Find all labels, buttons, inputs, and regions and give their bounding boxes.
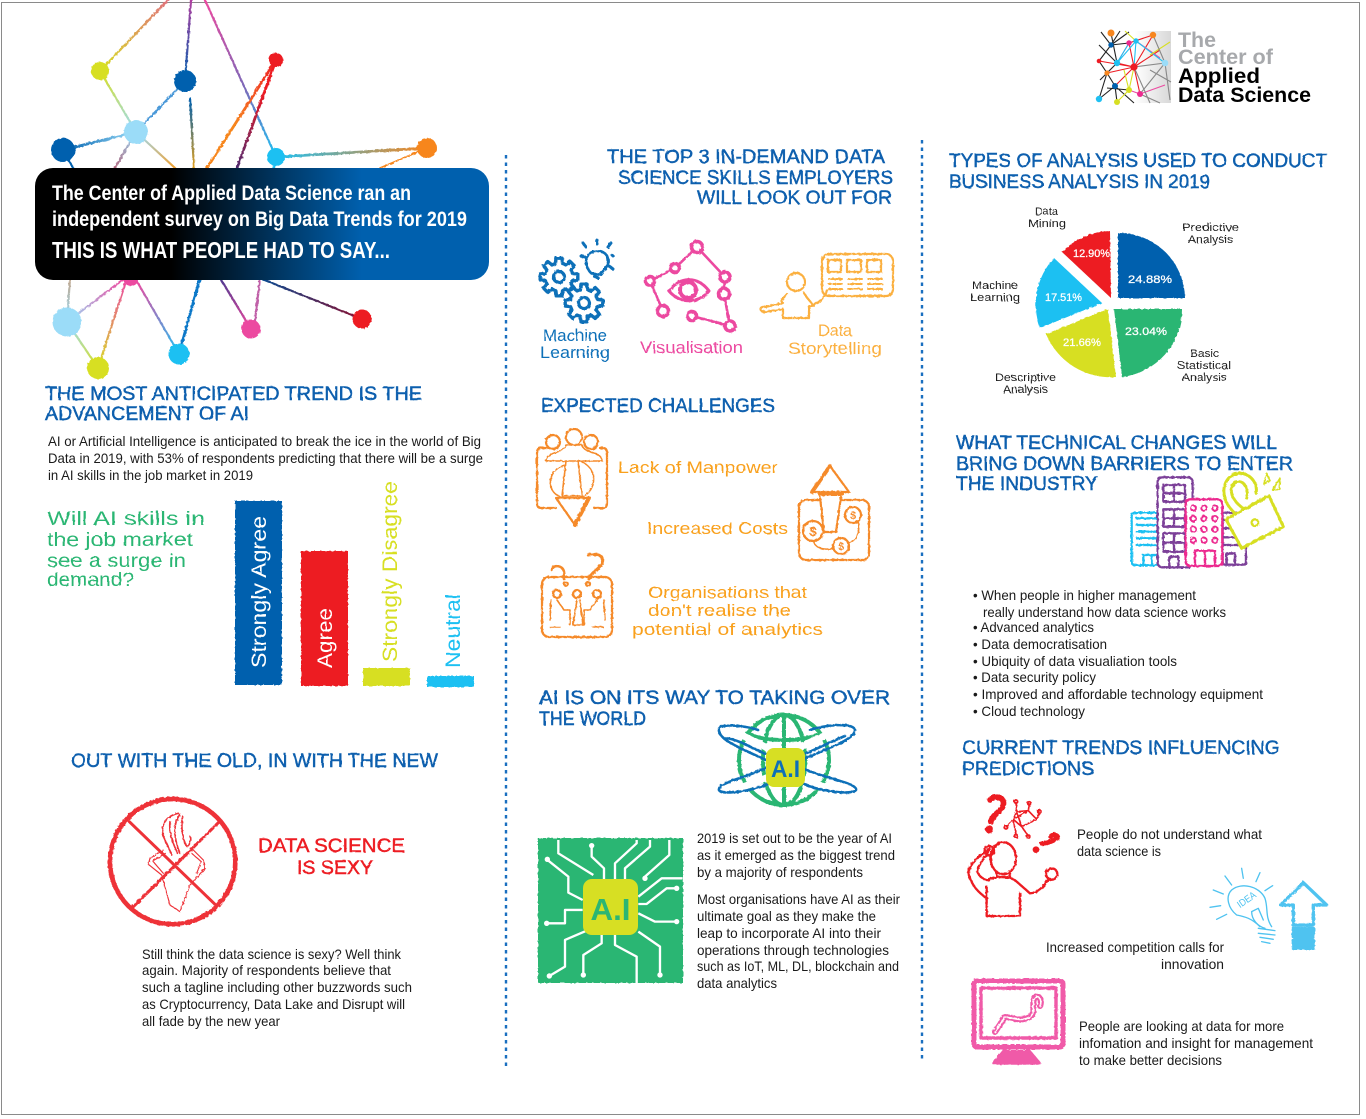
pie labels: Analysis <box>1003 384 1049 396</box>
text <box>632 583 823 639</box>
icon: buildings and open lock <box>1132 473 1283 567</box>
bullet list: • When people in higher management <box>973 588 1196 603</box>
icon: monitor with chart <box>974 981 1063 1063</box>
text block: as it emerged as the biggest trend <box>697 848 895 863</box>
pie labels: Data <box>1035 206 1059 218</box>
intro text: AI or Artificial Intelligence is anticipated to break the ice in the world of Big <box>48 434 481 449</box>
pie labels: Predictive <box>1182 222 1239 234</box>
bullet list: • Data security policy <box>973 670 1096 685</box>
logo: The <box>1178 29 1216 52</box>
text block: such as IoT, ML, DL, blockchain and <box>697 959 899 974</box>
pie chart: 12.90% <box>1073 248 1110 260</box>
label: Machine <box>543 326 607 345</box>
bullet list: • Advanced analytics <box>973 620 1094 635</box>
heading: PREDICTIONS <box>962 759 1094 780</box>
text block: ultimate goal as they make the <box>697 909 876 924</box>
heading <box>607 147 893 209</box>
icon: increased costs: $ <box>809 524 817 539</box>
panel: current trends <box>962 738 1327 1068</box>
pie labels: Analysis <box>1182 372 1228 384</box>
pie labels: Learning <box>970 292 1020 304</box>
icon: idea bulb and up arrow: IDEA <box>1235 890 1259 911</box>
logo: Data Science <box>1178 84 1311 107</box>
pie labels: Mining <box>1028 218 1066 230</box>
bullet list: • Cloud technology <box>973 704 1085 719</box>
network graphic <box>51 0 437 379</box>
survey question <box>47 509 205 591</box>
bullet list <box>973 588 1263 719</box>
logo: Applied <box>1178 65 1260 88</box>
text: Organisations that <box>648 583 807 602</box>
label <box>788 321 882 358</box>
heading: THE MOST ANTICIPATED TREND IS THE <box>45 384 422 405</box>
intro text <box>48 434 483 483</box>
text block: Most organisations have AI as their <box>697 892 900 907</box>
icon: presenter and board <box>760 254 893 318</box>
text <box>1046 940 1224 972</box>
bullet list: • Ubiquity of data visualiation tools <box>973 654 1177 669</box>
heading: OUT WITH THE OLD, IN WITH THE NEW <box>71 751 438 772</box>
icon: confused person <box>968 797 1057 916</box>
survey question: demand? <box>47 570 134 591</box>
bullet list: really understand how data science works <box>983 605 1226 620</box>
intro text: in AI skills in the job market in 2019 <box>48 468 253 483</box>
bar chart: Neutral <box>442 594 465 668</box>
banner: independent survey on Big Data Trends for 2019 <box>52 208 467 231</box>
panel: expected challenges <box>537 396 869 639</box>
panel: top 3 skills <box>540 147 893 362</box>
text: innovation <box>1161 957 1224 972</box>
paragraph: again. Majority of respondents believe that <box>142 963 391 978</box>
pie chart <box>1036 231 1185 377</box>
intro text: Data in 2019, with 53% of respondents predicting that there will be a surge <box>48 451 483 466</box>
heading <box>956 433 1293 495</box>
text block: operations through technologies <box>697 943 889 958</box>
pie labels <box>970 206 1239 396</box>
text: potential of analytics <box>632 620 823 639</box>
paragraph: Still think the data science is sexy? Well think <box>142 947 401 962</box>
paragraph: as Cryptocurrency, Data Lake and Disrupt will <box>142 997 405 1012</box>
heading <box>962 738 1280 780</box>
logo network mark <box>1096 30 1171 105</box>
logo <box>1096 29 1311 107</box>
text: don't realise the <box>648 601 791 620</box>
survey question: see a surge in <box>47 551 186 572</box>
pie chart: 23.04% <box>1125 326 1167 338</box>
icon: AI chip <box>538 838 683 983</box>
label: Learning <box>540 343 610 362</box>
heading: THE WORLD <box>539 709 646 730</box>
pie chart: 21.66% <box>1063 337 1101 349</box>
heading <box>539 688 890 730</box>
pie labels: Statistical <box>1177 360 1231 372</box>
banner: The Center of Applied Data Science ran an <box>52 182 411 205</box>
heading: CURRENT TRENDS INFLUENCING <box>962 738 1280 759</box>
bar chart <box>235 481 474 687</box>
text: Lack of Manpower <box>618 458 778 477</box>
heading: SCIENCE SKILLS EMPLOYERS <box>618 168 893 189</box>
callout: data science is sexy: DATA SCIENCE <box>258 836 405 857</box>
panel: most anticipated trend <box>45 384 483 687</box>
bullet list: • Data democratisation <box>973 637 1107 652</box>
label: Storytelling <box>788 339 882 358</box>
text: Increased competition calls for <box>1046 940 1224 955</box>
icon: gears and bulb <box>540 240 613 322</box>
banner: THIS IS WHAT PEOPLE HAD TO SAY... <box>52 237 390 263</box>
text: infomation and insight for management <box>1079 1036 1313 1051</box>
pie labels: Machine <box>972 280 1018 292</box>
text block: 2019 is set out to be the year of AI <box>697 831 892 846</box>
panel: types of analysis <box>949 151 1327 396</box>
icon: visualisation eye network <box>646 242 735 331</box>
pie chart: 24.88% <box>1128 274 1172 286</box>
heading: ADVANCEMENT OF AI <box>45 404 249 425</box>
text block: data analytics <box>697 976 777 991</box>
text block: by a majority of respondents <box>697 865 863 880</box>
heading: BUSINESS ANALYSIS IN 2019 <box>949 172 1210 193</box>
icon: increased costs: $ <box>838 541 844 553</box>
paragraph <box>142 947 412 1029</box>
pie labels: Basic <box>1190 348 1220 360</box>
banner <box>35 168 489 280</box>
text block <box>697 831 900 991</box>
text: Increased Costs <box>647 519 788 538</box>
survey question: the job market <box>47 530 194 551</box>
heading: WHAT TECHNICAL CHANGES WILL <box>956 433 1277 454</box>
heading: EXPECTED CHALLENGES <box>541 396 775 417</box>
text <box>1079 1019 1313 1068</box>
label: Data <box>818 321 853 340</box>
heading <box>949 151 1327 193</box>
label: Visualisation <box>640 338 743 357</box>
bullet list: • Improved and affordable technology equipment <box>973 687 1263 702</box>
survey question: Will AI skills in <box>47 509 205 530</box>
logo: Center of <box>1178 46 1274 69</box>
icon: AI globe: A.I <box>771 756 800 783</box>
text <box>1077 827 1262 859</box>
pie labels: Analysis <box>1188 234 1234 246</box>
bar chart: Agree <box>314 608 337 668</box>
icon: increased costs <box>799 466 869 560</box>
text: to make better decisions <box>1079 1053 1222 1068</box>
bar chart: Strongly Agree <box>248 516 271 668</box>
callout: data science is sexy <box>258 836 405 879</box>
heading: TYPES OF ANALYSIS USED TO CONDUCT <box>949 151 1327 172</box>
icon: idea bulb and up arrow <box>1210 868 1327 948</box>
panel: AI taking over <box>538 688 900 991</box>
icon: lack of manpower <box>537 429 607 525</box>
bar chart: Strongly Disagree <box>379 481 402 662</box>
heading <box>45 384 422 425</box>
icon: questioning team <box>542 554 612 637</box>
paragraph: all fade by the new year <box>142 1014 280 1029</box>
paragraph: such a tagline including other buzzwords such <box>142 980 412 995</box>
panel: out with the old <box>71 751 438 1029</box>
heading: WILL LOOK OUT FOR <box>697 188 892 209</box>
text: data science is <box>1077 844 1161 859</box>
label <box>540 326 610 362</box>
text: People are looking at data for more <box>1079 1019 1284 1034</box>
heading: AI IS ON ITS WAY TO TAKING OVER <box>539 688 890 709</box>
icon: crossed-out figure <box>110 799 235 924</box>
panel: technical changes <box>956 433 1293 719</box>
callout: data science is sexy: IS SEXY <box>297 858 373 879</box>
icon: AI globe <box>719 715 856 805</box>
heading: BRING DOWN BARRIERS TO ENTER <box>956 454 1293 475</box>
icon: increased costs: $ <box>850 510 856 522</box>
heading: THE TOP 3 IN-DEMAND DATA <box>607 147 885 168</box>
pie chart: 17.51% <box>1045 292 1082 304</box>
icon: AI chip: A.I <box>590 892 630 927</box>
text block: leap to incorporate AI into their <box>697 926 881 941</box>
pie labels: Descriptive <box>995 372 1056 384</box>
text: People do not understand what <box>1077 827 1262 842</box>
heading: THE INDUSTRY <box>956 474 1098 495</box>
